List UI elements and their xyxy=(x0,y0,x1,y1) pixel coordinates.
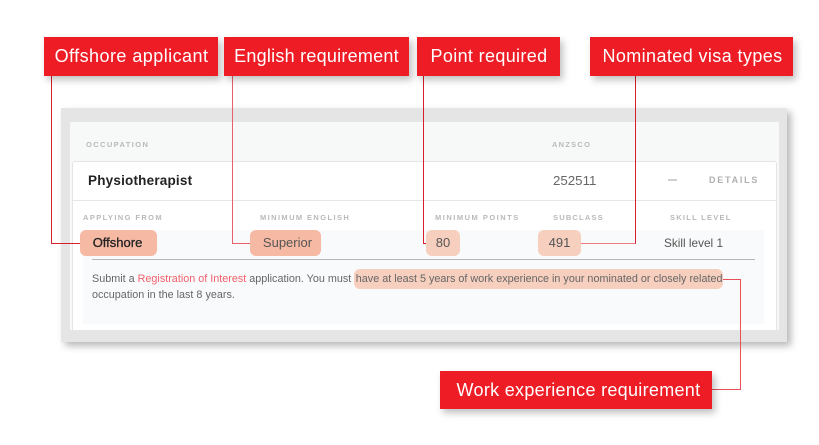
panel: occupation card frame xyxy=(61,108,787,342)
pill: 80 xyxy=(426,230,460,256)
pill: 491: 491 xyxy=(549,235,570,250)
label: work experience requirement xyxy=(440,371,712,409)
requirement text: Submit a Registration of Interest application. You must have at least 5 years of work experience in your nominated or closely related xyxy=(92,273,722,285)
requirement text xyxy=(92,273,722,300)
heading: subclass: SUBCLASS xyxy=(553,213,604,222)
panel: inner occupation background xyxy=(70,122,779,330)
connector: visa types xyxy=(581,76,636,244)
connector: points xyxy=(423,76,426,244)
heading: minimum points: MINIMUM POINTS xyxy=(435,213,520,222)
details link: DETAILS xyxy=(709,175,759,185)
label: nominated visa types: Nominated visa types xyxy=(602,46,783,66)
label: point required xyxy=(417,37,560,76)
label: english requirement: English requirement xyxy=(234,46,399,66)
heading: anzsco column: ANZSCO xyxy=(552,140,591,149)
connector: work experience xyxy=(712,279,741,390)
requirement text: occupation in the last 8 years. xyxy=(92,288,235,300)
panel: occupation details card xyxy=(72,161,777,330)
label: point required: Point required xyxy=(430,46,547,66)
connector: offshore xyxy=(51,76,80,244)
heading: occupation column: OCCUPATION xyxy=(86,140,149,149)
label: english requirement xyxy=(224,37,409,76)
heading: skill level: SKILL LEVEL xyxy=(670,213,732,222)
label: nominated visa types xyxy=(590,37,793,76)
skill level value: Skill level 1 xyxy=(664,236,723,250)
occupation name: Physiotherapist xyxy=(88,173,192,188)
pill: offshore xyxy=(80,230,157,256)
connector: english xyxy=(232,76,250,244)
divider row xyxy=(73,200,776,201)
divider rule xyxy=(92,259,755,260)
pill: offshore: Offshore xyxy=(93,235,142,250)
panel: visa details background xyxy=(83,230,764,324)
heading: minimum english: MINIMUM ENGLISH xyxy=(260,213,350,222)
label: work experience requirement: Work experience requirement xyxy=(457,380,700,400)
label: offshore applicant: Offshore applicant xyxy=(55,46,208,66)
highlight: work experience xyxy=(354,269,723,289)
anzsco code: 252511 xyxy=(553,173,596,188)
label: offshore applicant xyxy=(44,37,218,76)
pill: superior xyxy=(250,230,321,256)
pill: 80: 80 xyxy=(436,235,450,250)
heading: applying from: APPLYING FROM xyxy=(83,213,163,222)
pill: superior: Superior xyxy=(263,235,312,250)
pill: 491 xyxy=(538,230,581,256)
dash icon xyxy=(668,179,677,181)
